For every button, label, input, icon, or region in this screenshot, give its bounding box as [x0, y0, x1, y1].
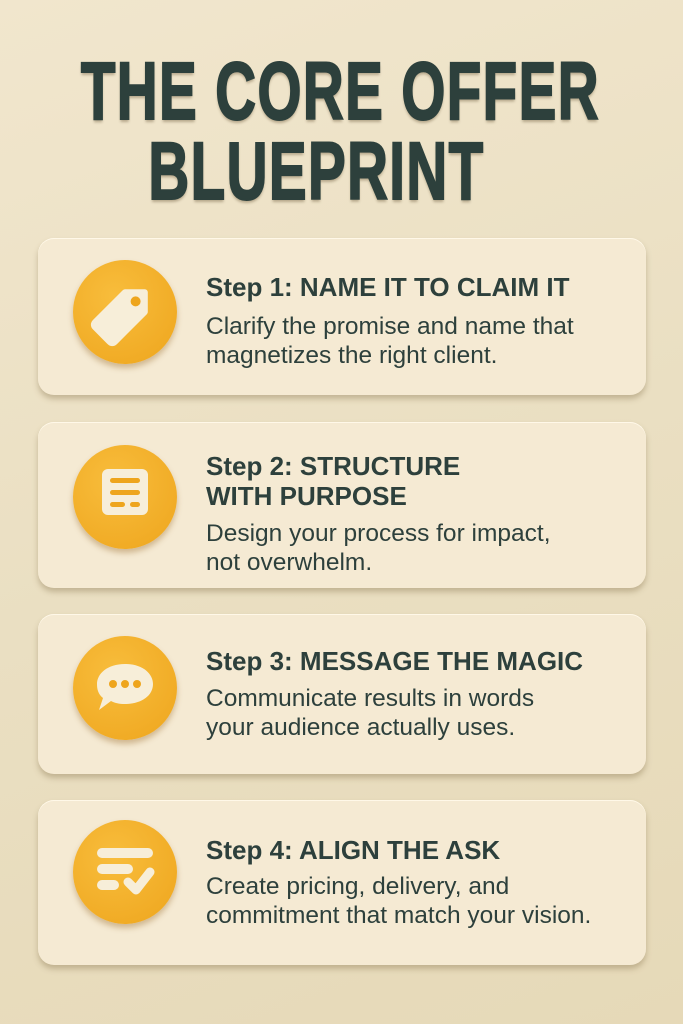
heading: WITH PURPOSE — [206, 481, 407, 511]
text: not overwhelm. — [206, 549, 372, 576]
text: commitment that match your vision. — [206, 902, 591, 929]
icon: document — [73, 445, 177, 549]
text: Design your process for impact, — [206, 520, 550, 547]
text: Clarify the promise and name that — [206, 313, 574, 340]
heading: Step 2: STRUCTURE — [206, 451, 460, 481]
heading: Step 1: NAME IT TO CLAIM IT — [206, 272, 570, 302]
text: Communicate results in words — [206, 685, 534, 712]
panel: step 1 — [38, 238, 646, 395]
icon: checklist — [73, 820, 177, 924]
panel: step 2 — [38, 422, 646, 588]
icon: chat — [73, 636, 177, 740]
title: BLUEPRINT — [148, 126, 485, 217]
panel: step 4 — [38, 800, 646, 965]
text — [206, 313, 574, 369]
text — [206, 520, 550, 576]
text: your audience actually uses. — [206, 714, 515, 741]
text: Create pricing, delivery, and — [206, 873, 509, 900]
heading — [206, 451, 460, 511]
text: magnetizes the right client. — [206, 342, 497, 369]
heading: Step 3: MESSAGE THE MAGIC — [206, 646, 583, 676]
panel: step 3 — [38, 614, 646, 774]
text — [206, 685, 534, 741]
heading: Step 4: ALIGN THE ASK — [206, 835, 500, 865]
title — [80, 46, 600, 217]
icon: tag — [73, 260, 177, 364]
text — [206, 873, 591, 929]
title: THE CORE OFFER — [81, 46, 600, 137]
